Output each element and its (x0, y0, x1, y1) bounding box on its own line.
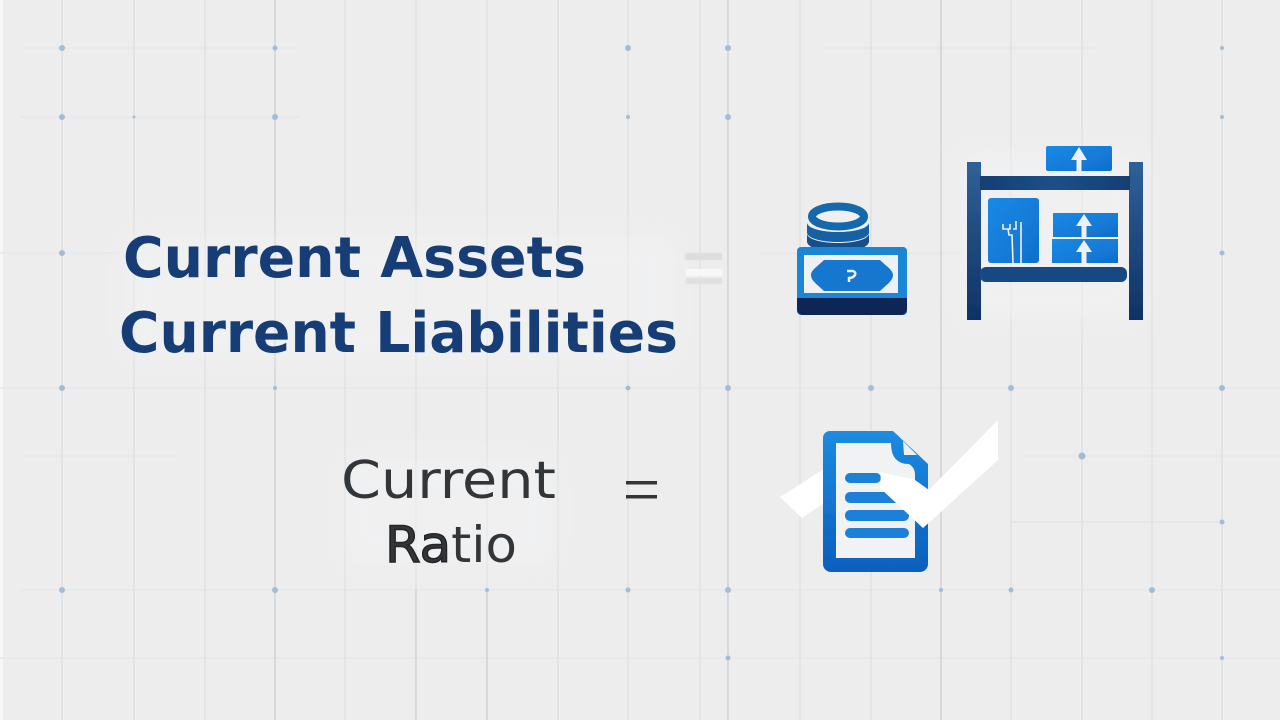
title: fraction text (119, 226, 678, 366)
coin stack (807, 202, 869, 252)
document lines (845, 473, 909, 538)
check mark right arm (880, 420, 998, 528)
soft glow behind content (125, 150, 1140, 565)
shelf frame (967, 162, 1143, 320)
label: Current Ratio: Ratio (385, 516, 517, 574)
denominator: Current Liabilities: Current Liabilities (119, 301, 678, 366)
label: Current Ratio: Current (341, 451, 556, 511)
icon: cash and coins (797, 202, 907, 315)
icon: document with check (780, 420, 998, 572)
stacked boxes (1053, 213, 1118, 237)
icon: inventory shelf (967, 146, 1143, 320)
label: Current Ratio (341, 451, 556, 574)
tall box (988, 198, 1039, 263)
document (823, 431, 928, 572)
banknote (797, 247, 907, 315)
numerator: Current Assets: Current Assets (123, 226, 586, 291)
equals sign (626, 481, 657, 498)
check mark left arm (780, 469, 824, 518)
top box (1046, 146, 1112, 171)
faded equals sign (685, 253, 722, 284)
